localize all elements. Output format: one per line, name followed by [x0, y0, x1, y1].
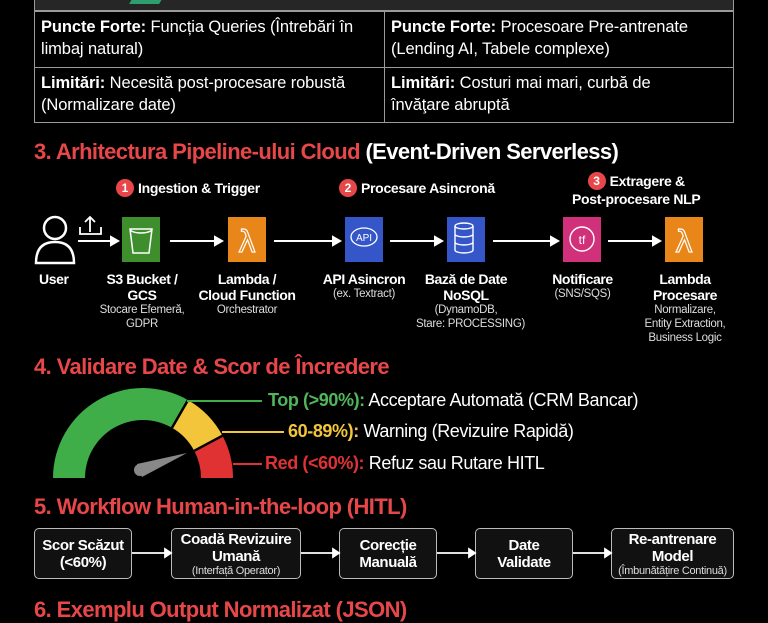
icon: api: API: [356, 233, 372, 244]
table header row: [34, 0, 734, 11]
icon: api: [345, 217, 383, 262]
icon: green cube: [129, 0, 165, 4]
label: api: API Asincron: [323, 271, 405, 287]
icon: database: [447, 217, 485, 262]
needle: [137, 453, 187, 477]
label: lambda: Orchestrator: [217, 304, 277, 316]
label: lambda procesare: Procesare: [653, 287, 717, 303]
box: coada revizuire: Coadă Revizuire: [181, 530, 291, 548]
legend: warning: 60-89%): Warning (Revizuire Rapidă): [288, 421, 573, 441]
green segment: [53, 388, 188, 478]
box: coada revizuire: Umană: [212, 548, 260, 564]
label: s3: [100, 271, 184, 330]
icon: lambda: λ: [238, 225, 256, 260]
icon: lambda processing: [665, 217, 703, 262]
heading: section 3: 3. Arhitectura Pipeline-ului Cloud (Event-Driven Serverless): [34, 139, 618, 164]
leader lines: [187, 400, 262, 402]
box: coada revizuire: [171, 528, 301, 579]
label: s3: GDPR: [126, 318, 158, 330]
label: nosql: (DynamoDB,: [435, 304, 497, 316]
label: lambda: Lambda /: [218, 271, 276, 287]
cell: puncte forte right: [384, 11, 734, 68]
label: nosql: NoSQL: [443, 287, 489, 303]
label: lambda procesare: Entity Extraction,: [645, 318, 725, 330]
table: comparison: [34, 0, 734, 123]
step 2 label: 2: [345, 181, 351, 195]
heading: section 5: 5. Workflow Human-in-the-loop (HITL): [34, 494, 407, 519]
label: notificare: Notificare: [552, 271, 613, 287]
label: api: (ex. Textract): [333, 288, 395, 300]
label: api: [323, 271, 405, 300]
cell: limitari left: Limitări: Necesită post-procesare robustă (Normalizare date): [41, 74, 345, 114]
box: scor scazut: Scor Scăzut: [42, 536, 124, 554]
step 3 label: Post-procesare NLP: [572, 191, 700, 207]
label: nosql: Stare: PROCESSING): [416, 318, 525, 330]
cell: limitari left: [34, 67, 385, 123]
step 3 label: 3: [593, 174, 600, 188]
pipeline diagram: [34, 216, 703, 264]
cell: puncte forte left: [34, 11, 385, 68]
box: date validate: Date: [509, 536, 539, 554]
chart: confidence gauge: [53, 388, 284, 478]
label: nosql: [416, 271, 525, 330]
box: corectie: Corecție: [360, 536, 416, 554]
label: lambda procesare: [645, 271, 725, 344]
cell: limitari right: Limitări: Costuri mai mari, curbă de: [391, 74, 651, 92]
heading: section 6 (cut off): 6. Exemplu Output Normalizat (JSON): [34, 597, 407, 622]
box: scor scazut: (<60%): [60, 554, 106, 570]
box: date validate: Validate: [497, 554, 551, 570]
heading: section 4: 4. Validare Date & Scor de Încredere: [34, 354, 389, 379]
red segment: [194, 436, 233, 478]
box: date validate: [475, 528, 573, 579]
box: scor scazut: [34, 528, 132, 579]
legend: red: Red (<60%): Refuz sau Rutare HITL: [265, 453, 544, 473]
box: re-antrenare: (Îmbunătățire Continuă): [618, 564, 727, 576]
box: re-antrenare: Model: [652, 548, 693, 564]
label: lambda: Cloud Function: [198, 287, 296, 303]
box: coada revizuire: (Interfață Operator): [192, 564, 280, 576]
yellow segment: [172, 400, 222, 451]
cell: limitari right: învăţare abruptă: [391, 96, 510, 114]
icon: lambda: [228, 217, 266, 262]
step 3 label: [572, 172, 700, 207]
box: re-antrenare: [611, 528, 734, 579]
label: s3: GCS: [127, 287, 157, 303]
step 1 label: Ingestion & Trigger: [138, 180, 260, 196]
label: s3: S3 Bucket /: [106, 271, 178, 287]
box: corectie: Manuală: [359, 554, 417, 570]
cell: limitari right: [384, 67, 734, 123]
icon: lambda processing: λ: [675, 225, 693, 260]
label: lambda procesare: Normalizare,: [654, 304, 716, 316]
arrows: hitl: [132, 547, 612, 559]
label: lambda: [198, 271, 296, 316]
box: corectie: [339, 528, 437, 579]
step 2 label: Procesare Asincronă: [361, 180, 495, 196]
icon: notification: tf: [579, 233, 586, 247]
cell: puncte forte right: Puncte Forte: Procesoare Pre-antrenate (Lending AI, Tabele complexe): [391, 18, 688, 58]
label: lambda procesare: Lambda: [659, 271, 711, 287]
icon: user: [36, 217, 74, 263]
label: lambda procesare: Business Logic: [648, 332, 722, 344]
label: s3: Stocare Efemeră,: [100, 304, 184, 316]
arrows: [78, 237, 660, 245]
step 1 label: 1: [122, 181, 128, 195]
label: notificare: (SNS/SQS): [554, 288, 611, 300]
box: re-antrenare: Re-antrenare: [629, 530, 716, 548]
icon: notification: [563, 217, 601, 262]
step 3 label: Extragere &: [610, 173, 685, 189]
label: nosql: Bază de Date: [425, 271, 507, 287]
cell: puncte forte left: Puncte Forte: Funcția Queries (Întrebări în limbaj natural): [41, 18, 353, 58]
icon: s3 bucket: [122, 217, 160, 262]
label: notificare: [552, 271, 613, 300]
icon: upload: [80, 217, 101, 234]
legend: top: Top (>90%): Acceptare Automată (CRM Bancar): [268, 390, 638, 410]
label: user: User: [39, 271, 69, 287]
